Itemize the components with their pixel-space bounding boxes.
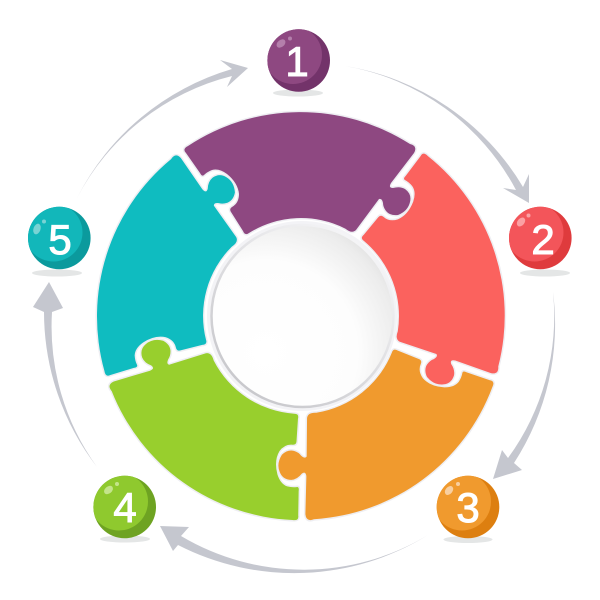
puzzle ring [71,112,530,549]
badge 4 [90,472,156,542]
badge 3: 3 [456,484,480,531]
puzzle piece 3: orange [257,314,515,548]
arrow: step 2 to 3 [493,292,555,479]
arrow: step 4 to 5 [33,282,97,467]
badge 2: 2 [531,216,555,263]
badge 3 [433,472,499,543]
badge 5: 5 [48,216,72,263]
puzzle piece 4: green [89,315,347,549]
badge 1 [264,26,330,96]
badge 5 [24,204,91,276]
badge 2 [506,204,572,276]
badge 4: 4 [113,484,137,531]
arrow: step 1 to 2 [345,66,529,203]
puzzle piece 2: red [343,142,530,399]
arrow: step 5 to 1 [77,60,248,198]
badge 1: 1 [285,38,309,85]
arrow: step 3 to 4 [160,526,428,573]
puzzle piece 5: teal [71,144,258,402]
centre disc [207,221,397,411]
puzzle piece 1: purple [184,112,415,234]
